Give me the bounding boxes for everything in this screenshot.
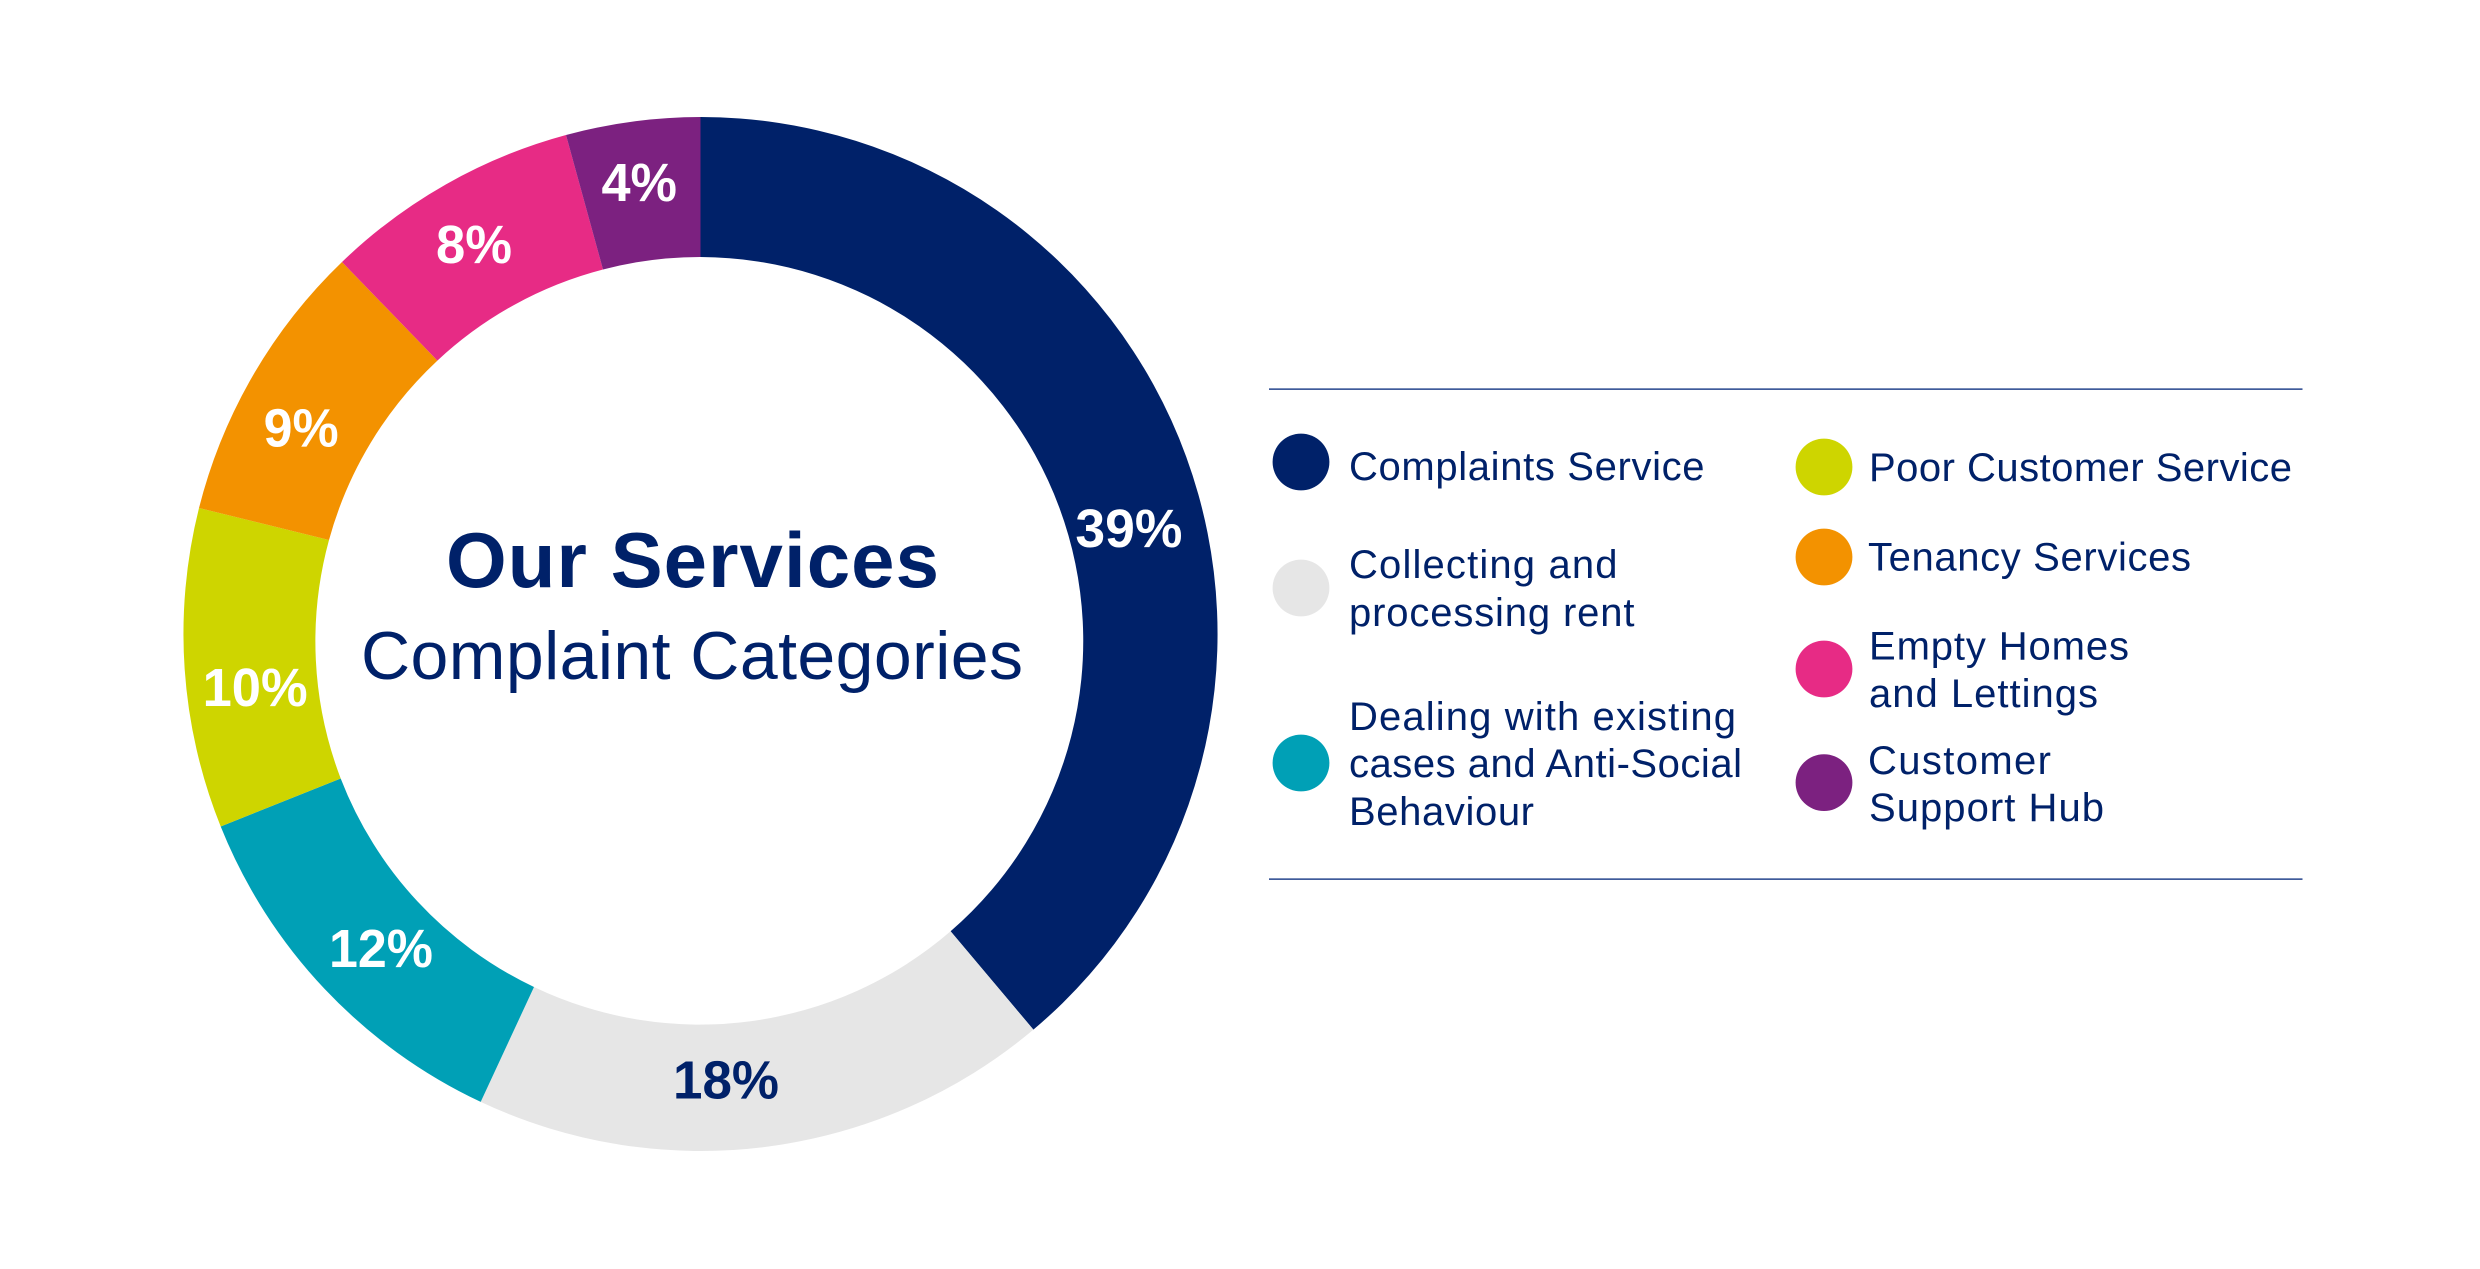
legend item: Dealing with existing cases and Anti-Social Behaviour [1273,695,1742,834]
legend item: Collecting and processing rent: Collecting and [1349,543,1618,587]
legend item: Customer Support Hub [1796,739,2104,830]
legend item: Tenancy Services [1796,529,2191,585]
legend item: Empty Homes and Lettings: Empty Homes [1869,624,2129,668]
segment: Complaints Service 39% [700,117,1218,1030]
donut chart: complaint categories [183,117,1218,1151]
segment: Poor Customer Service 10% [183,508,341,826]
segment: Empty Homes and Lettings 8% [342,135,603,361]
legend item: Dealing with existing cases and Anti-Social Behaviour: Dealing with existing [1349,695,1736,739]
segment: Dealing with existing cases and Anti-Social Behaviour 12%: 12% [329,919,433,979]
legend item: Complaints Service [1273,434,1704,490]
legend item: Dealing with existing cases and Anti-Social Behaviour: cases and Anti-Social [1349,742,1742,786]
legend item: Tenancy Services: Tenancy Services [1868,536,2191,580]
segment: Customer Support Hub 4% [566,117,700,270]
legend item: Poor Customer Service: Poor Customer Service [1869,446,2292,490]
centre title [361,516,1023,694]
segment: Collecting and processing rent 18% [481,931,1033,1151]
legend item: Dealing with existing cases and Anti-Social Behaviour: Behaviour [1349,790,1534,834]
segment: Tenancy Services 9%: 9% [264,398,339,458]
legend [1269,388,2302,880]
legend item: Empty Homes and Lettings [1796,624,2129,716]
legend item: Collecting and processing rent: processing rent [1349,591,1634,635]
segment: Empty Homes and Lettings 8%: 8% [436,215,512,275]
legend item: Collecting and processing rent [1273,543,1634,635]
segment: Dealing with existing cases and Anti-Social Behaviour 12% [221,778,534,1102]
subheading: Complaint Categories: Complaint Categories [361,618,1023,694]
segment: Tenancy Services 9% [199,262,437,540]
segment: Poor Customer Service 10%: 10% [203,658,308,718]
heading: Our Services: Our Services [446,516,939,604]
legend item: Empty Homes and Lettings: and Lettings [1869,672,2098,716]
legend item: Customer Support Hub: Support Hub [1869,786,2104,830]
legend item: Customer Support Hub: Customer [1868,739,2051,783]
segment: Collecting and processing rent 18%: 18% [673,1050,779,1110]
segment: Complaints Service 39%: 39% [1075,499,1182,559]
legend item: Poor Customer Service [1796,439,2292,495]
segment: Customer Support Hub 4%: 4% [602,153,677,213]
legend item: Complaints Service: Complaints Service [1349,445,1704,489]
